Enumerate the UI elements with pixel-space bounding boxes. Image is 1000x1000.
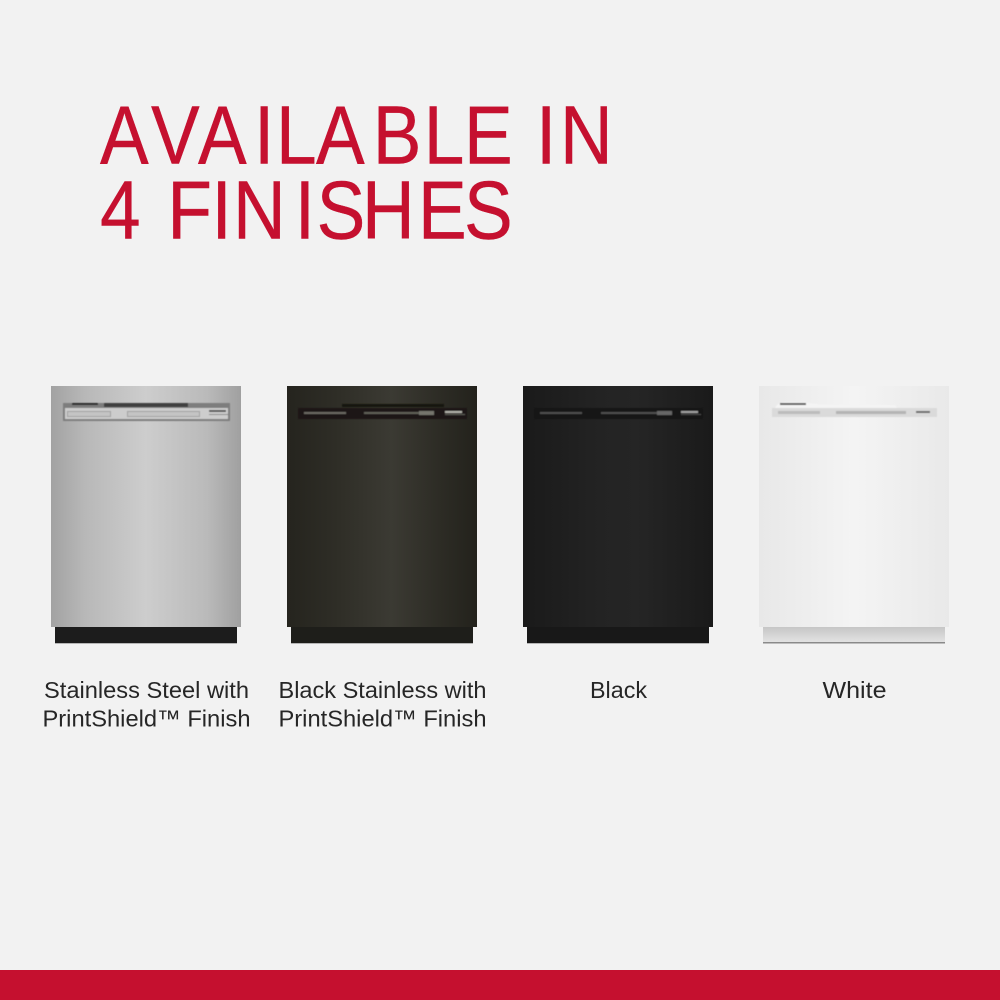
title: AVAILABLE IN (100, 88, 613, 182)
label: stainless steel (42, 677, 250, 732)
label: stainless steel: PrintShield™ Finish (42, 706, 250, 732)
label: black stainless: PrintShield™ Finish (278, 706, 486, 732)
label: black stainless: Black Stainless with (278, 677, 486, 703)
label: white: White (822, 677, 886, 703)
label: black: Black (590, 677, 647, 703)
panel: black dishwasher (523, 386, 713, 644)
panel: white dishwasher (759, 386, 949, 644)
title (100, 88, 613, 257)
label: black stainless (278, 677, 486, 732)
panel: black stainless dishwasher (287, 386, 477, 644)
title: 4 FINISHES (100, 163, 513, 257)
footer bar (0, 970, 1000, 1000)
label: stainless steel: Stainless Steel with (44, 677, 249, 703)
panel: stainless steel dishwasher (51, 386, 241, 644)
